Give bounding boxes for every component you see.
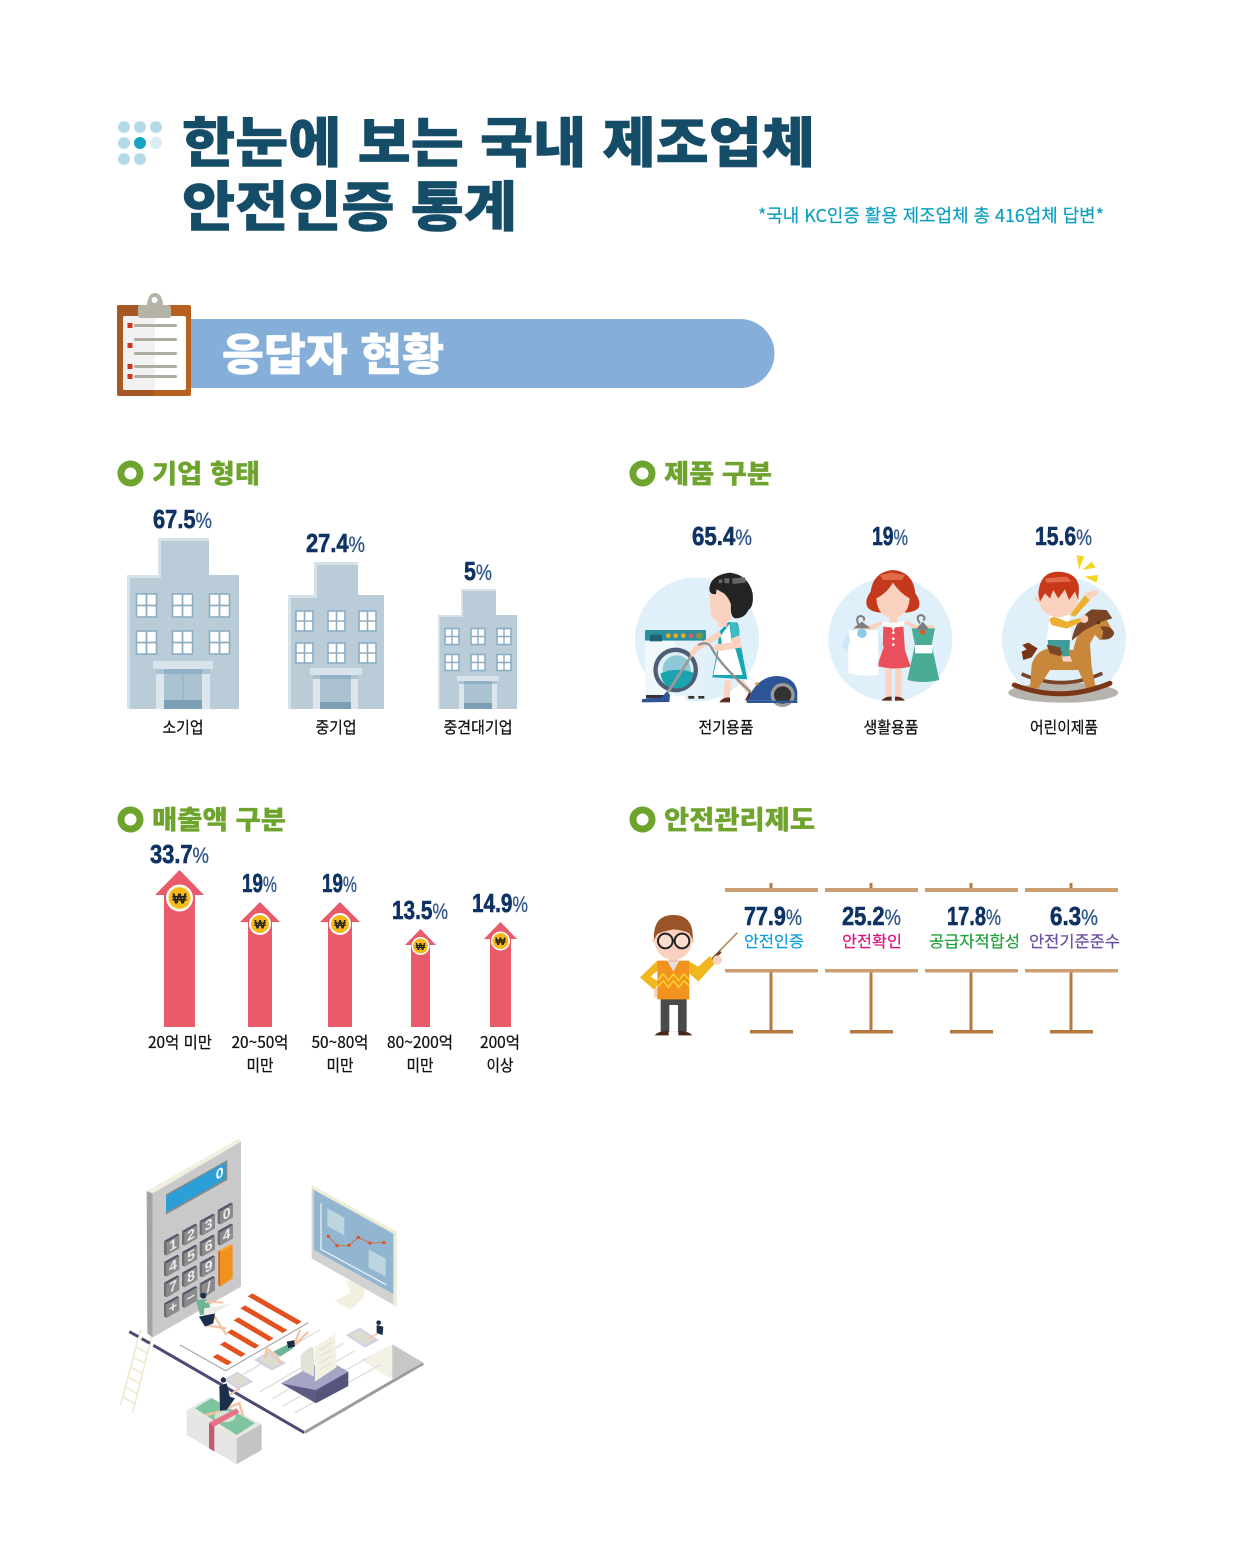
value: mid-size company: 5% bbox=[464, 556, 492, 586]
value: medium company: 27.4% bbox=[306, 528, 365, 558]
label: 5 to 8 billion: 50~80억 bbox=[312, 1029, 368, 1053]
label: 8 to 20 billion: 미만 bbox=[406, 1052, 434, 1076]
monitor bbox=[312, 1185, 397, 1310]
heading: revenue: 매출액 구분 bbox=[152, 800, 286, 837]
value: children's products: 15.6% bbox=[1035, 521, 1092, 551]
label: 8 to 20 billion: 80~200억 bbox=[387, 1029, 453, 1053]
title: 안전인증 통계 bbox=[182, 163, 517, 242]
value: small company: 67.5% bbox=[153, 504, 212, 534]
calculator: 6 bbox=[205, 1236, 213, 1256]
guide lines bbox=[243, 1330, 380, 1413]
panel: product category bbox=[633, 454, 1126, 738]
label: over 20 billion: 200억 bbox=[480, 1029, 520, 1053]
icon: woman with clothes bbox=[828, 570, 952, 701]
icon: title dots bbox=[118, 121, 162, 165]
sign: supplier conformity: 공급자적합성 bbox=[929, 928, 1020, 952]
value: over 20 billion: 14.9% bbox=[472, 888, 528, 918]
label: appliances: 전기용품 bbox=[698, 714, 754, 738]
money stack bbox=[187, 1397, 262, 1464]
value: 8 to 20 billion: 13.5% bbox=[392, 895, 448, 925]
value: 5 to 8 billion: 19% bbox=[322, 868, 357, 898]
icon: clipboard bbox=[117, 293, 191, 396]
platform edges bbox=[129, 1332, 423, 1433]
label: small company: 소기업 bbox=[162, 714, 204, 738]
calculator: 7 bbox=[169, 1277, 177, 1297]
value: appliances: 65.4% bbox=[692, 521, 752, 551]
value: under 2 billion: 33.7% bbox=[150, 839, 209, 869]
calculator: 0 bbox=[216, 1164, 224, 1184]
building: mid-size company bbox=[438, 589, 517, 709]
label: 2 to 5 billion bbox=[232, 1029, 288, 1076]
heading: product category: 제품 구분 bbox=[664, 454, 772, 491]
sign: safety certification: 77.9% bbox=[744, 901, 802, 931]
label: children's products: 어린이제품 bbox=[1030, 714, 1098, 738]
panel: company type bbox=[121, 454, 517, 738]
label: 2 to 5 billion: 20~50억 bbox=[232, 1029, 288, 1053]
arrow: 5 to 8 billion: ₩ bbox=[334, 918, 346, 932]
sign: safety standard compliance: 6.3% bbox=[1050, 901, 1098, 931]
sign: safety confirmation: 안전확인 bbox=[842, 928, 902, 952]
arrow: 2 to 5 billion bbox=[240, 902, 280, 1027]
sign: safety certification bbox=[725, 883, 818, 1034]
title bbox=[182, 99, 815, 242]
label: 5 to 8 billion bbox=[312, 1029, 368, 1076]
ladder bbox=[121, 1329, 152, 1413]
icon: child on rocking horse bbox=[1002, 555, 1126, 703]
value: household goods: 19% bbox=[872, 521, 908, 551]
arrow: 2 to 5 billion: ₩ bbox=[254, 918, 266, 932]
building: medium company bbox=[288, 562, 384, 709]
sign: safety confirmation: 25.2% bbox=[842, 901, 901, 931]
calculator: 8 bbox=[187, 1267, 195, 1287]
arrow: 8 to 20 billion: ₩ bbox=[416, 942, 426, 953]
calculator: 3 bbox=[205, 1215, 213, 1235]
heading: safety management: 안전관리제도 bbox=[664, 800, 815, 837]
label: 2 to 5 billion: 미만 bbox=[246, 1052, 274, 1076]
sign: safety standard compliance bbox=[1025, 883, 1120, 1034]
sign: safety confirmation bbox=[825, 883, 918, 1034]
label: medium company: 중기업 bbox=[316, 714, 356, 738]
calculator: 0 bbox=[223, 1204, 231, 1224]
panel: respondents banner bbox=[185, 319, 774, 388]
arrow: over 20 billion: ₩ bbox=[495, 936, 506, 948]
calculator: 2 bbox=[187, 1225, 195, 1245]
working figures bbox=[196, 1293, 383, 1417]
calculator: + bbox=[169, 1297, 177, 1318]
calculator: 9 bbox=[205, 1257, 213, 1277]
calculator: 4 bbox=[169, 1256, 177, 1276]
label: under 2 billion: 20억 미만 bbox=[148, 1029, 212, 1053]
illustration: isometric calculator and monitor bbox=[121, 1138, 423, 1464]
label: 8 to 20 billion bbox=[387, 1029, 453, 1076]
label: over 20 billion bbox=[480, 1029, 520, 1076]
banner heading: 응답자 현황 bbox=[222, 319, 444, 383]
label: household goods: 생활용품 bbox=[864, 714, 918, 738]
arrow: under 2 billion: ₩ bbox=[172, 890, 187, 908]
label: 5 to 8 billion: 미만 bbox=[326, 1052, 354, 1076]
calculator: 4 bbox=[223, 1225, 231, 1245]
calculator: 5 bbox=[187, 1246, 195, 1266]
calculator: / bbox=[207, 1278, 211, 1296]
panel: safety management bbox=[633, 800, 1120, 1035]
label: over 20 billion: 이상 bbox=[486, 1052, 514, 1076]
printer with receipt bbox=[281, 1334, 348, 1403]
value: 2 to 5 billion: 19% bbox=[242, 868, 277, 898]
sign: supplier conformity bbox=[925, 883, 1020, 1034]
survey note: *국내 KC인증 활용 제조업체 총 416업체 답변* bbox=[758, 202, 1104, 228]
calculator bbox=[147, 1138, 241, 1337]
heading: company type: 기업 형태 bbox=[152, 454, 260, 491]
sign: safety standard compliance: 안전기준준수 bbox=[1029, 928, 1120, 952]
icon: woman vacuuming bbox=[635, 573, 797, 707]
panel: revenue bbox=[121, 800, 528, 1076]
orange bar chart bbox=[180, 1293, 308, 1371]
calculator: 1 bbox=[169, 1235, 177, 1255]
label: mid-size company: 중견대기업 bbox=[444, 714, 512, 738]
arrow: 5 to 8 billion bbox=[320, 902, 360, 1027]
title: 한눈에 보는 국내 제조업체 bbox=[182, 99, 815, 178]
arrow: 8 to 20 billion bbox=[405, 929, 436, 1027]
sign: supplier conformity: 17.8% bbox=[947, 901, 1001, 931]
arrow: under 2 billion bbox=[155, 870, 204, 1027]
icon: teacher with pointer bbox=[640, 915, 737, 1035]
calculator: − bbox=[187, 1287, 195, 1308]
sign: safety certification: 안전인증 bbox=[744, 928, 804, 952]
arrow: over 20 billion bbox=[484, 922, 517, 1027]
banner bar bbox=[185, 319, 774, 388]
building: small company bbox=[127, 538, 239, 709]
